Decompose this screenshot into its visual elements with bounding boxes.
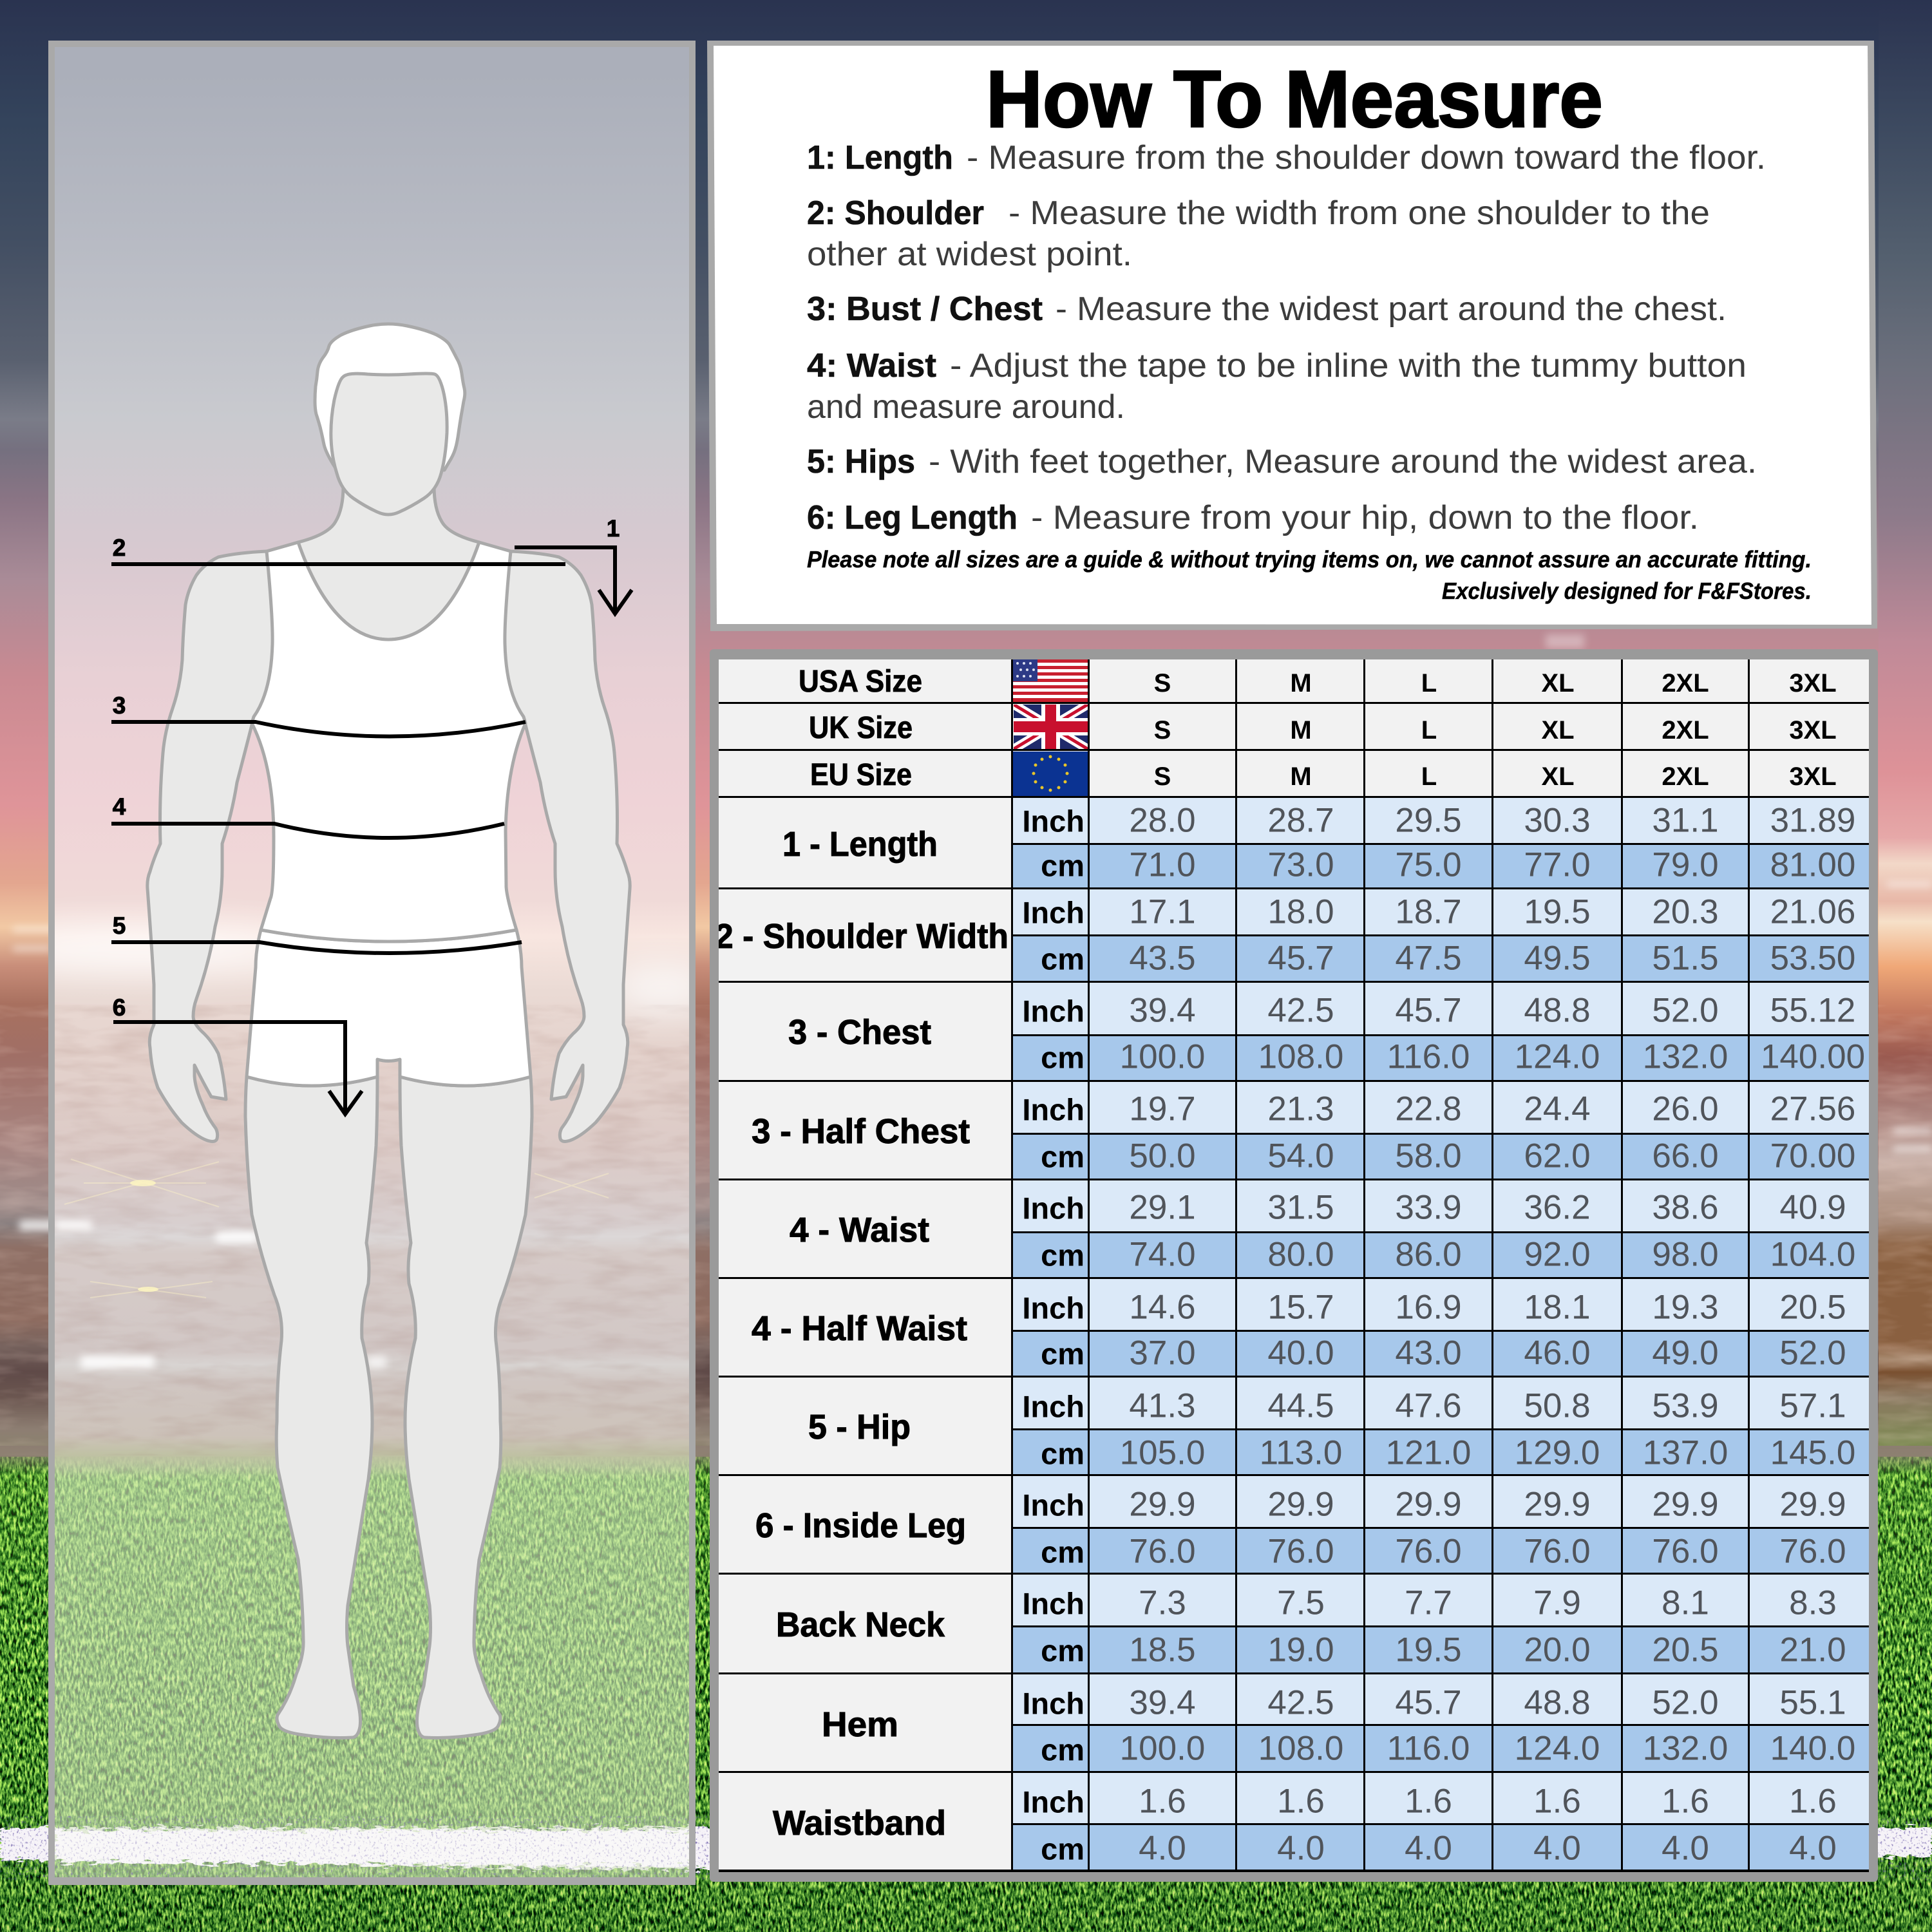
row: 3 - Chest: 52.0 — [1652, 992, 1719, 1029]
row: EU size: 3XL — [1789, 762, 1837, 791]
row: 5 - Hip: 5 - Hip — [808, 1408, 911, 1446]
row: 6 - Inside Leg: 29.9 — [1524, 1485, 1591, 1524]
row: 3 - Chest: 55.12 — [1770, 992, 1855, 1029]
row: 6 - Inside Leg: Inch — [1022, 1488, 1084, 1522]
row: Hem: 48.8 — [1524, 1683, 1591, 1722]
instruction 4: and measure around. — [807, 388, 1125, 426]
row: 4 - Waist: cm — [1041, 1238, 1084, 1273]
row: 4 - Waist: 74.0 — [1129, 1235, 1196, 1274]
row: Back Neck: 19.5 — [1395, 1631, 1462, 1669]
instruction 6: - Measure from your hip, down to the floor. — [1031, 499, 1699, 536]
row: UK size: L — [1421, 716, 1437, 744]
row: 6 - Inside Leg: 76.0 — [1129, 1533, 1196, 1570]
icon: face — [331, 374, 447, 515]
row: Waistband: 4.0 — [1405, 1829, 1452, 1868]
icon: USA flag — [1013, 659, 1088, 703]
icon: left arm — [147, 551, 273, 1141]
row: Hem: 124.0 — [1515, 1730, 1600, 1767]
row: 4 - Half Waist: 52.0 — [1779, 1334, 1846, 1372]
instruction 5: 5: Hips — [807, 443, 915, 480]
row: 3 - Chest: 116.0 — [1387, 1038, 1470, 1075]
row: 5 - Hip: Inch — [1022, 1390, 1084, 1423]
row: Hem: 42.5 — [1267, 1683, 1334, 1722]
row: 6 - Inside Leg: 29.9 — [1395, 1485, 1462, 1524]
row: 2 - Shoulder Width: 19.5 — [1524, 893, 1591, 931]
row: UK size: S — [1154, 716, 1171, 744]
row: Hem: 52.0 — [1652, 1683, 1719, 1722]
row: USA size: L — [1421, 669, 1437, 697]
row: 3 - Chest — [788, 992, 1865, 1075]
row: 4 - Waist: 40.9 — [1779, 1189, 1846, 1226]
figure: male body outline — [147, 324, 630, 1738]
row: 4 - Waist: Inch — [1022, 1191, 1084, 1225]
row: EU size: 2XL — [1662, 762, 1709, 791]
row: Back Neck: 8.1 — [1662, 1584, 1709, 1622]
row: 4 - Half Waist: cm — [1041, 1337, 1084, 1370]
row: 1 - Length: 81.00 — [1770, 846, 1855, 884]
row: 6 - Inside Leg — [755, 1485, 1846, 1570]
instruction 2 — [807, 194, 1710, 273]
row: Back Neck — [776, 1584, 1846, 1669]
row: 4 - Half Waist: Inch — [1022, 1291, 1084, 1325]
row: 4 - Waist: 4 - Waist — [790, 1211, 929, 1249]
row: 3 - Chest: 45.7 — [1395, 992, 1462, 1029]
row: 3 - Chest: 100.0 — [1120, 1038, 1205, 1075]
row: Back Neck: Back Neck — [776, 1605, 945, 1644]
row: 1 - Length: 28.0 — [1129, 801, 1196, 840]
row: 4 - Waist: 80.0 — [1267, 1235, 1334, 1274]
row: Back Neck: 7.7 — [1405, 1584, 1452, 1622]
instruction 4 — [807, 347, 1747, 426]
row: 6 - Inside Leg: 76.0 — [1267, 1533, 1334, 1570]
measurement lines and arrows — [111, 547, 632, 1114]
row: Waistband: Waistband — [773, 1804, 946, 1842]
row: 4 - Waist: 38.6 — [1652, 1189, 1719, 1226]
row: 1 - Length: 29.5 — [1395, 801, 1462, 840]
row: 3 - Half Chest: 22.8 — [1395, 1090, 1462, 1128]
row: 2 - Shoulder Width: 18.7 — [1395, 893, 1462, 931]
row: Hem: 132.0 — [1643, 1730, 1728, 1767]
row: 4 - Half Waist: 15.7 — [1267, 1288, 1334, 1327]
icon: EU flag — [1013, 752, 1088, 797]
row: 3 - Half Chest: 21.3 — [1267, 1090, 1334, 1128]
icon: right arm — [504, 551, 630, 1141]
row: 5 - Hip: 129.0 — [1515, 1434, 1600, 1472]
row: Back Neck: 7.5 — [1277, 1584, 1325, 1622]
row: USA size: USA Size — [799, 665, 922, 699]
row: 3 - Half Chest — [752, 1090, 1855, 1175]
instruction 4: - Adjust the tape to be inline with the tummy button — [950, 347, 1747, 384]
measurement numbers: 1 — [607, 515, 620, 542]
row: 5 - Hip — [808, 1387, 1855, 1472]
row: 3 - Half Chest: 26.0 — [1652, 1090, 1719, 1128]
row: 3 - Chest: 39.4 — [1129, 992, 1196, 1029]
instruction 4: 4: Waist — [807, 347, 936, 384]
row: 3 - Half Chest: 24.4 — [1524, 1090, 1591, 1128]
row: Waistband: 1.6 — [1533, 1783, 1581, 1820]
row: 2 - Shoulder Width: 2 - Shoulder Width — [715, 917, 1009, 956]
icon: UK flag — [1014, 705, 1088, 749]
row: Waistband: 1.6 — [1405, 1783, 1452, 1820]
row: 4 - Waist: 33.9 — [1395, 1189, 1462, 1226]
row: Waistband: 1.6 — [1789, 1783, 1837, 1820]
row: UK size: 3XL — [1789, 716, 1837, 744]
row: 6 - Inside Leg: 6 - Inside Leg — [755, 1506, 966, 1545]
measurement numbers: 2 — [113, 535, 126, 561]
row: 2 - Shoulder Width — [719, 899, 1855, 970]
row: 3 - Half Chest: 70.00 — [1770, 1137, 1855, 1175]
row: 3 - Half Chest: 19.7 — [1129, 1090, 1196, 1128]
row: Back Neck: 19.0 — [1267, 1631, 1334, 1669]
row: 5 - Hip: 137.0 — [1643, 1434, 1728, 1472]
row: 5 - Hip: cm — [1041, 1436, 1084, 1471]
row: 6 - Inside Leg: 76.0 — [1779, 1533, 1846, 1570]
row: 1 - Length: 75.0 — [1395, 846, 1462, 884]
row: Hem: 100.0 — [1120, 1730, 1205, 1767]
instruction 2: - Measure the width from one shoulder to the — [1009, 194, 1710, 232]
background: stadium with sunset sky — [0, 0, 1932, 1481]
row: 6 - Inside Leg: 29.9 — [1129, 1485, 1196, 1524]
line 6: leg length arrow — [113, 1022, 362, 1114]
row: Back Neck: 7.9 — [1533, 1584, 1581, 1622]
line 5: hip — [111, 942, 522, 953]
row: 4 - Half Waist: 40.0 — [1267, 1334, 1334, 1372]
row: 6 - Inside Leg: 76.0 — [1524, 1533, 1591, 1570]
row: UK size — [809, 711, 1837, 745]
row: USA size: 3XL — [1789, 669, 1837, 697]
row: 4 - Half Waist: 19.3 — [1652, 1288, 1719, 1327]
row: Waistband: 1.6 — [1662, 1783, 1709, 1820]
row: Waistband: 1.6 — [1277, 1783, 1325, 1820]
icon: hair — [315, 324, 465, 470]
row: USA size: S — [1154, 669, 1171, 697]
row: 1 - Length: 71.0 — [1129, 846, 1196, 884]
row: 6 - Inside Leg: 29.9 — [1779, 1485, 1846, 1524]
icon: white vest — [252, 542, 526, 942]
row: 3 - Chest: 42.5 — [1267, 992, 1334, 1029]
row: Waistband — [773, 1783, 1837, 1868]
row: Waistband: Inch — [1022, 1785, 1084, 1819]
row: UK size: UK Size — [809, 711, 913, 745]
row: EU size: XL — [1541, 762, 1575, 791]
row: EU size: EU Size — [810, 758, 912, 792]
row: Back Neck: Inch — [1022, 1587, 1084, 1620]
measurement numbers: 6 — [113, 994, 126, 1021]
row: Hem: Inch — [1022, 1686, 1084, 1721]
row: 5 - Hip: 145.0 — [1770, 1434, 1855, 1472]
row: 3 - Chest: 132.0 — [1643, 1038, 1728, 1075]
row: 5 - Hip: 53.9 — [1652, 1387, 1719, 1425]
row: Hem: 116.0 — [1387, 1730, 1470, 1767]
row: 2 - Shoulder Width: 53.50 — [1770, 939, 1855, 978]
row: 1 - Length: 30.3 — [1524, 801, 1591, 840]
row: 2 - Shoulder Width: 47.5 — [1395, 939, 1462, 978]
instruction 2: other at widest point. — [807, 236, 1132, 273]
row: 6 - Inside Leg: 76.0 — [1652, 1533, 1719, 1570]
row: 4 - Waist: 29.1 — [1129, 1189, 1196, 1226]
row: Waistband: 4.0 — [1277, 1829, 1325, 1868]
panel: body figure — [0, 41, 721, 1885]
row: 5 - Hip: 121.0 — [1386, 1434, 1471, 1472]
row: 2 - Shoulder Width: 45.7 — [1267, 939, 1334, 978]
row: 2 - Shoulder Width: 17.1 — [1129, 893, 1196, 931]
row: USA size: XL — [1541, 669, 1575, 697]
row: 6 - Inside Leg: 29.9 — [1652, 1485, 1719, 1524]
line 4: waist — [111, 824, 504, 838]
row: USA size — [799, 665, 1837, 699]
row: EU size: M — [1290, 762, 1312, 791]
row: 3 - Half Chest: 54.0 — [1267, 1137, 1334, 1175]
row: Back Neck: 21.0 — [1779, 1631, 1846, 1669]
row: Waistband: 1.6 — [1139, 1783, 1186, 1820]
instruction 1: 1: Length — [807, 139, 953, 176]
row: 1 - Length: 31.89 — [1770, 801, 1855, 840]
row: 1 - Length: cm — [1041, 849, 1084, 882]
row: USA size: 2XL — [1662, 669, 1709, 697]
row: 2 - Shoulder Width: 21.06 — [1770, 893, 1855, 931]
row: Hem: 140.0 — [1770, 1730, 1855, 1767]
row: 6 - Inside Leg: 29.9 — [1267, 1485, 1334, 1524]
row: 1 - Length: 77.0 — [1524, 846, 1591, 884]
row: Back Neck: 20.5 — [1652, 1631, 1719, 1669]
row: UK size: 2XL — [1662, 716, 1709, 744]
row: 3 - Chest: 108.0 — [1258, 1038, 1343, 1075]
row: 3 - Chest: 48.8 — [1524, 992, 1591, 1029]
disclaimer note: Exclusively designed for F&FStores. — [1442, 578, 1812, 604]
row: 6 - Inside Leg: 76.0 — [1395, 1533, 1462, 1570]
row: 2 - Shoulder Width: 49.5 — [1524, 939, 1591, 978]
row: 4 - Half Waist: 46.0 — [1524, 1334, 1591, 1372]
row: 4 - Waist — [790, 1189, 1855, 1274]
table grid lines — [719, 659, 1869, 1872]
row: 4 - Half Waist: 20.5 — [1779, 1288, 1846, 1327]
row: 4 - Half Waist: 4 - Half Waist — [752, 1309, 967, 1348]
row: 3 - Half Chest: 27.56 — [1770, 1090, 1855, 1128]
row: 1 - Length: Inch — [1022, 804, 1084, 838]
table cell backgrounds — [719, 659, 1869, 1871]
row: 5 - Hip: 41.3 — [1129, 1387, 1196, 1425]
row: 1 - Length: 31.1 — [1652, 801, 1719, 840]
row: Waistband: cm — [1041, 1832, 1084, 1866]
row: USA size: M — [1290, 669, 1312, 697]
row: Waistband: 4.0 — [1533, 1829, 1581, 1868]
line 2: shoulder — [111, 562, 565, 566]
line 1: length arrow — [515, 547, 632, 614]
row: 4 - Half Waist: 37.0 — [1129, 1334, 1196, 1372]
row: 3 - Half Chest: 58.0 — [1395, 1137, 1462, 1175]
instruction 3: - Measure the widest part around the chest. — [1056, 290, 1727, 328]
row: Back Neck: 7.3 — [1139, 1584, 1186, 1622]
background: grass pitch — [0, 1446, 1932, 1932]
measurement numbers: 3 — [113, 692, 126, 719]
row: 4 - Half Waist: 14.6 — [1129, 1288, 1196, 1327]
row: Hem: 108.0 — [1258, 1730, 1343, 1767]
row: 2 - Shoulder Width: Inch — [1022, 895, 1084, 930]
row: 3 - Half Chest: 66.0 — [1652, 1137, 1719, 1175]
row: 1 - Length: 73.0 — [1267, 846, 1334, 884]
row: 4 - Half Waist: 43.0 — [1395, 1334, 1462, 1372]
row: EU size: S — [1154, 762, 1171, 791]
row: 3 - Chest: 140.00 — [1761, 1038, 1865, 1075]
row: 1 - Length: 1 - Length — [782, 825, 938, 864]
row: 4 - Half Waist: 16.9 — [1395, 1288, 1462, 1327]
row: 4 - Waist: 92.0 — [1524, 1235, 1591, 1274]
row: 4 - Half Waist: 49.0 — [1652, 1334, 1719, 1372]
row: 3 - Half Chest: cm — [1041, 1140, 1084, 1173]
measurement numbers: 4 — [113, 793, 126, 820]
row: 5 - Hip: 57.1 — [1779, 1387, 1846, 1425]
row: 1 - Length — [782, 801, 1855, 884]
row: Back Neck: cm — [1041, 1633, 1084, 1668]
instruction 2: 2: Shoulder — [807, 194, 984, 232]
row: 6 - Inside Leg: cm — [1041, 1535, 1084, 1569]
row: 4 - Waist: 98.0 — [1652, 1235, 1719, 1274]
row: 4 - Half Waist: 18.1 — [1524, 1288, 1591, 1327]
row: Back Neck: 20.0 — [1524, 1631, 1591, 1669]
row: EU size — [810, 758, 1837, 792]
row: Back Neck: 18.5 — [1129, 1631, 1196, 1669]
instruction 5: - With feet together, Measure around the widest area. — [929, 443, 1757, 480]
row: 3 - Chest: Inch — [1022, 994, 1084, 1028]
row: Hem: 55.1 — [1779, 1683, 1846, 1722]
disclaimer note: Please note all sizes are a guide & without trying items on, we cannot assure an accurate fitting. — [807, 546, 1812, 573]
row: 1 - Length: 28.7 — [1267, 801, 1334, 840]
row: 3 - Half Chest: 50.0 — [1129, 1137, 1196, 1175]
instruction 6: 6: Leg Length — [807, 499, 1018, 536]
row: 5 - Hip: 113.0 — [1260, 1434, 1342, 1472]
row: UK size: M — [1290, 716, 1312, 744]
row: 4 - Waist: 104.0 — [1770, 1235, 1855, 1274]
row: 3 - Half Chest: 3 - Half Chest — [752, 1112, 970, 1151]
row: 3 - Chest: 3 - Chest — [788, 1013, 931, 1052]
measurement numbers: 5 — [113, 913, 126, 939]
row: 2 - Shoulder Width: 43.5 — [1129, 939, 1196, 978]
row: 2 - Shoulder Width: 18.0 — [1267, 893, 1334, 931]
row: 4 - Waist: 31.5 — [1267, 1189, 1334, 1226]
instruction 1: - Measure from the shoulder down toward the floor. — [967, 139, 1766, 176]
icon: left leg — [245, 1077, 377, 1738]
icon: white shorts — [247, 930, 531, 1086]
row: 1 - Length: 79.0 — [1652, 846, 1719, 884]
row: Back Neck: 8.3 — [1789, 1584, 1837, 1622]
row: Waistband: 4.0 — [1789, 1829, 1837, 1868]
row: Waistband: 4.0 — [1662, 1829, 1709, 1868]
row: Hem — [822, 1683, 1855, 1767]
row: Waistband: 4.0 — [1139, 1829, 1186, 1868]
row: 4 - Waist: 36.2 — [1524, 1189, 1591, 1226]
row: Hem: 45.7 — [1395, 1683, 1462, 1722]
row: 2 - Shoulder Width: cm — [1041, 942, 1084, 976]
measurement numbers — [113, 515, 620, 1021]
row: 3 - Chest: 124.0 — [1515, 1038, 1600, 1075]
row: 4 - Half Waist — [752, 1288, 1846, 1372]
panel: how to measure — [707, 41, 1877, 631]
icon: right leg — [400, 1077, 532, 1738]
row: 3 - Half Chest: 62.0 — [1524, 1137, 1591, 1175]
row: EU size: L — [1421, 762, 1437, 791]
row: 3 - Chest: cm — [1041, 1041, 1084, 1074]
row: Hem: cm — [1041, 1732, 1084, 1767]
row: 3 - Half Chest: Inch — [1022, 1092, 1084, 1127]
row: Hem: Hem — [822, 1705, 898, 1744]
title: How To Measure — [986, 55, 1603, 144]
icon: neck — [298, 486, 479, 639]
row: Hem: 39.4 — [1129, 1683, 1196, 1722]
line 3: chest — [111, 722, 526, 737]
instruction 3: 3: Bust / Chest — [807, 290, 1043, 328]
row: 5 - Hip: 44.5 — [1267, 1387, 1334, 1425]
row: 5 - Hip: 47.6 — [1395, 1387, 1462, 1425]
row: 2 - Shoulder Width: 51.5 — [1652, 939, 1719, 978]
row: 2 - Shoulder Width: 20.3 — [1652, 893, 1719, 931]
row: 5 - Hip: 50.8 — [1524, 1387, 1591, 1425]
disclaimer note — [807, 546, 1812, 604]
panel: size chart table — [710, 649, 1878, 1882]
row: UK size: XL — [1541, 716, 1575, 744]
row: 4 - Waist: 86.0 — [1395, 1235, 1462, 1274]
row: 5 - Hip: 105.0 — [1120, 1434, 1205, 1472]
